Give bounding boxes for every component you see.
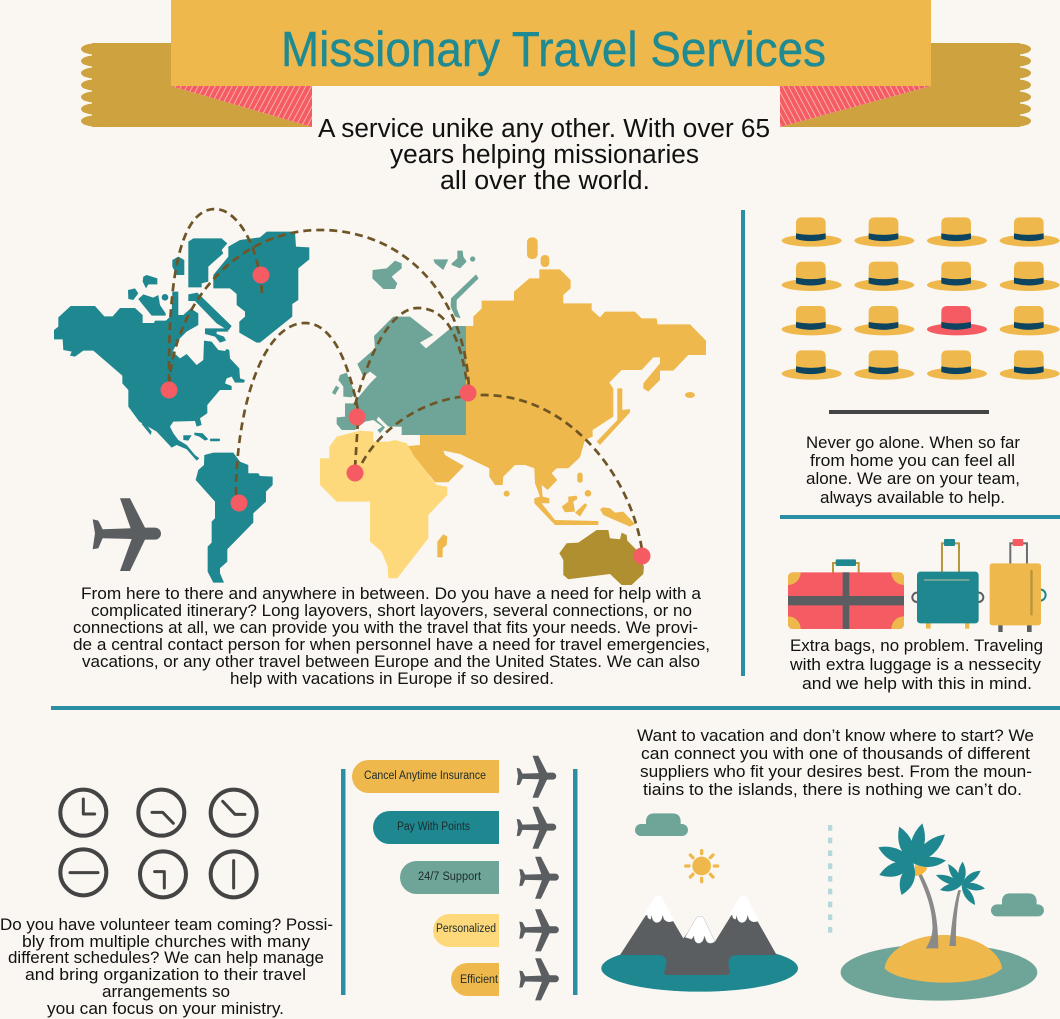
right ribbon fold bbox=[780, 86, 931, 127]
island scene bbox=[841, 823, 1044, 1001]
title: Missionary Travel Services bbox=[281, 23, 826, 77]
sun bbox=[686, 851, 718, 882]
map description text bbox=[73, 585, 710, 688]
never go alone text: from home you can feel all bbox=[810, 452, 1015, 470]
left ribbon fold bbox=[171, 86, 312, 127]
cloud bbox=[635, 813, 688, 836]
volunteer team text: you can focus on your ministry. bbox=[47, 1000, 284, 1018]
service list bbox=[352, 756, 559, 1000]
vacation text: can connect you with one of thousands of different bbox=[641, 745, 1030, 763]
pill: cancel anytime insurance bbox=[352, 760, 499, 793]
map description text: From here to there and anywhere in between. Do you have a need for help with a bbox=[81, 585, 702, 603]
never go alone text: Never go alone. When so far bbox=[806, 434, 1021, 452]
subtitle: all over the world. bbox=[440, 167, 650, 195]
yellow suitcase bbox=[990, 539, 1046, 632]
palm trunks bbox=[918, 874, 961, 948]
pill: personalized: Personalized bbox=[436, 923, 496, 935]
small airplanes bbox=[517, 756, 559, 1000]
map description text: help with vacations in Europe if so desired. bbox=[230, 670, 554, 688]
never go alone text: always available to help. bbox=[820, 489, 1005, 507]
volunteer team text: and bring organization to their travel bbox=[25, 966, 306, 984]
palm leaves bbox=[878, 823, 985, 905]
volunteer team text: Do you have volunteer team coming? Possi- bbox=[0, 916, 333, 934]
banner ribbon bbox=[81, 0, 1031, 127]
hats grid bbox=[782, 217, 1060, 380]
dotted separator bbox=[828, 825, 832, 933]
volunteer team text: arrangements so bbox=[102, 983, 230, 1001]
never go alone text bbox=[806, 434, 1021, 507]
right ribbon tail bbox=[780, 43, 1031, 127]
vacation text: suppliers who fit your desires best. From the moun- bbox=[640, 763, 1032, 781]
africa bbox=[320, 431, 447, 578]
extra bags text: and we help with this in mind. bbox=[802, 675, 1032, 693]
americas and greenland bbox=[54, 232, 309, 583]
luggage icons bbox=[788, 539, 1046, 632]
pill: 24/7 support bbox=[400, 861, 499, 894]
red hat bbox=[927, 306, 987, 335]
map description text: connections at all, we can provide you with the travel that fits your needs. We provi- bbox=[73, 619, 698, 637]
mountain scene bbox=[601, 813, 798, 992]
flight routes bbox=[169, 209, 642, 550]
pill: efficient bbox=[451, 963, 499, 996]
pill: 24/7 support: 24/7 Support bbox=[418, 871, 482, 883]
cloud bbox=[991, 893, 1044, 916]
pill: efficient: Efficient bbox=[460, 974, 499, 986]
teal suitcase bbox=[912, 539, 983, 629]
volunteer team text: bly from multiple churches with many bbox=[22, 933, 311, 951]
map description text: complicated itinerary? Long layovers, short layovers, several connections, or no bbox=[91, 602, 692, 620]
volunteer team text bbox=[0, 916, 333, 1018]
vacation text bbox=[637, 727, 1034, 799]
asia bbox=[408, 237, 706, 557]
vacation text: Want to vacation and don’t know where to start? We bbox=[637, 727, 1034, 745]
subtitle: A service unike any other. With over 65 bbox=[318, 115, 770, 143]
pill: pay with points: Pay With Points bbox=[397, 821, 470, 833]
map description text: vacations, or any other travel between Europe and the United States. We can also bbox=[82, 653, 700, 671]
volunteer team text: different schedules? We can help manage bbox=[8, 949, 324, 967]
pill: personalized bbox=[433, 914, 499, 947]
pill: cancel anytime insurance: Cancel Anytime Insurance bbox=[364, 770, 486, 782]
subtitle: years helping missionaries bbox=[390, 141, 699, 169]
map description text: de a central contact person for when personnel have a need for travel emergencies, bbox=[73, 636, 710, 654]
pill: pay with points bbox=[373, 811, 499, 844]
red suitcase bbox=[788, 559, 904, 629]
icon: large airplane bbox=[93, 498, 161, 571]
subtitle bbox=[318, 115, 770, 195]
extra bags text: with extra luggage is a nessecity bbox=[789, 656, 1042, 674]
extra bags text bbox=[789, 637, 1043, 693]
divider lines bbox=[51, 210, 1060, 995]
europe bbox=[332, 251, 479, 435]
never go alone text: alone. We are on your team, bbox=[806, 470, 1020, 488]
left ribbon tail bbox=[81, 43, 312, 127]
clocks bbox=[60, 790, 257, 897]
australia bbox=[559, 530, 644, 585]
extra bags text: Extra bags, no problem. Traveling bbox=[790, 637, 1043, 655]
location pins bbox=[160, 266, 650, 564]
world map bbox=[54, 209, 706, 585]
banner panel bbox=[171, 0, 931, 86]
vacation illustrations bbox=[601, 813, 1044, 1001]
vacation text: tiains to the islands, there is nothing we can’t do. bbox=[643, 781, 1022, 799]
